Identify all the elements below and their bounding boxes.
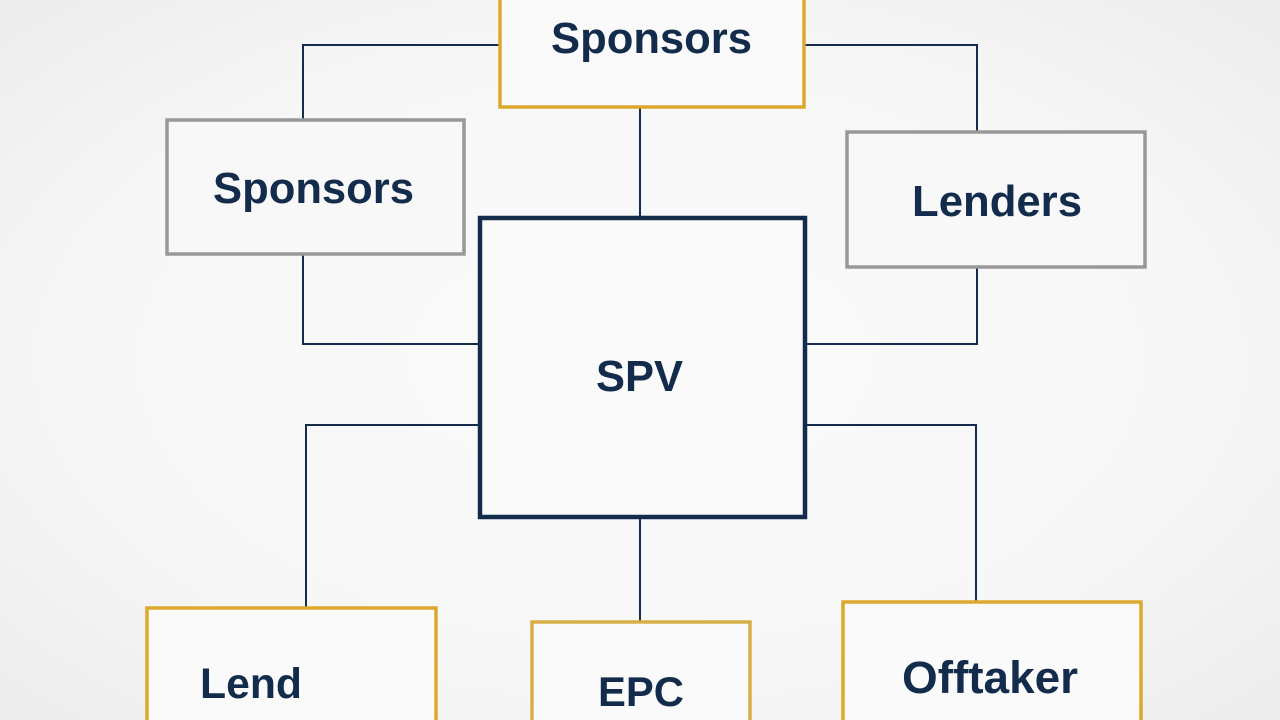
connectors between boxes [303, 45, 977, 622]
box: SPV: SPV [596, 352, 684, 401]
box: left Sponsors [167, 120, 464, 254]
box: Lenders [847, 132, 1145, 267]
box: Lend: Lend [200, 660, 302, 708]
box: SPV [480, 218, 805, 517]
box: top Sponsors [500, 0, 804, 107]
box: Lend [147, 608, 436, 720]
box: top Sponsors: Sponsors [551, 14, 752, 63]
box: EPC [532, 622, 750, 720]
box: Offtaker [843, 602, 1141, 720]
box: left Sponsors: Sponsors [213, 164, 414, 213]
box: EPC: EPC [598, 668, 684, 715]
box: Offtaker: Offtaker [902, 652, 1078, 703]
box: Lenders: Lenders [912, 177, 1082, 226]
